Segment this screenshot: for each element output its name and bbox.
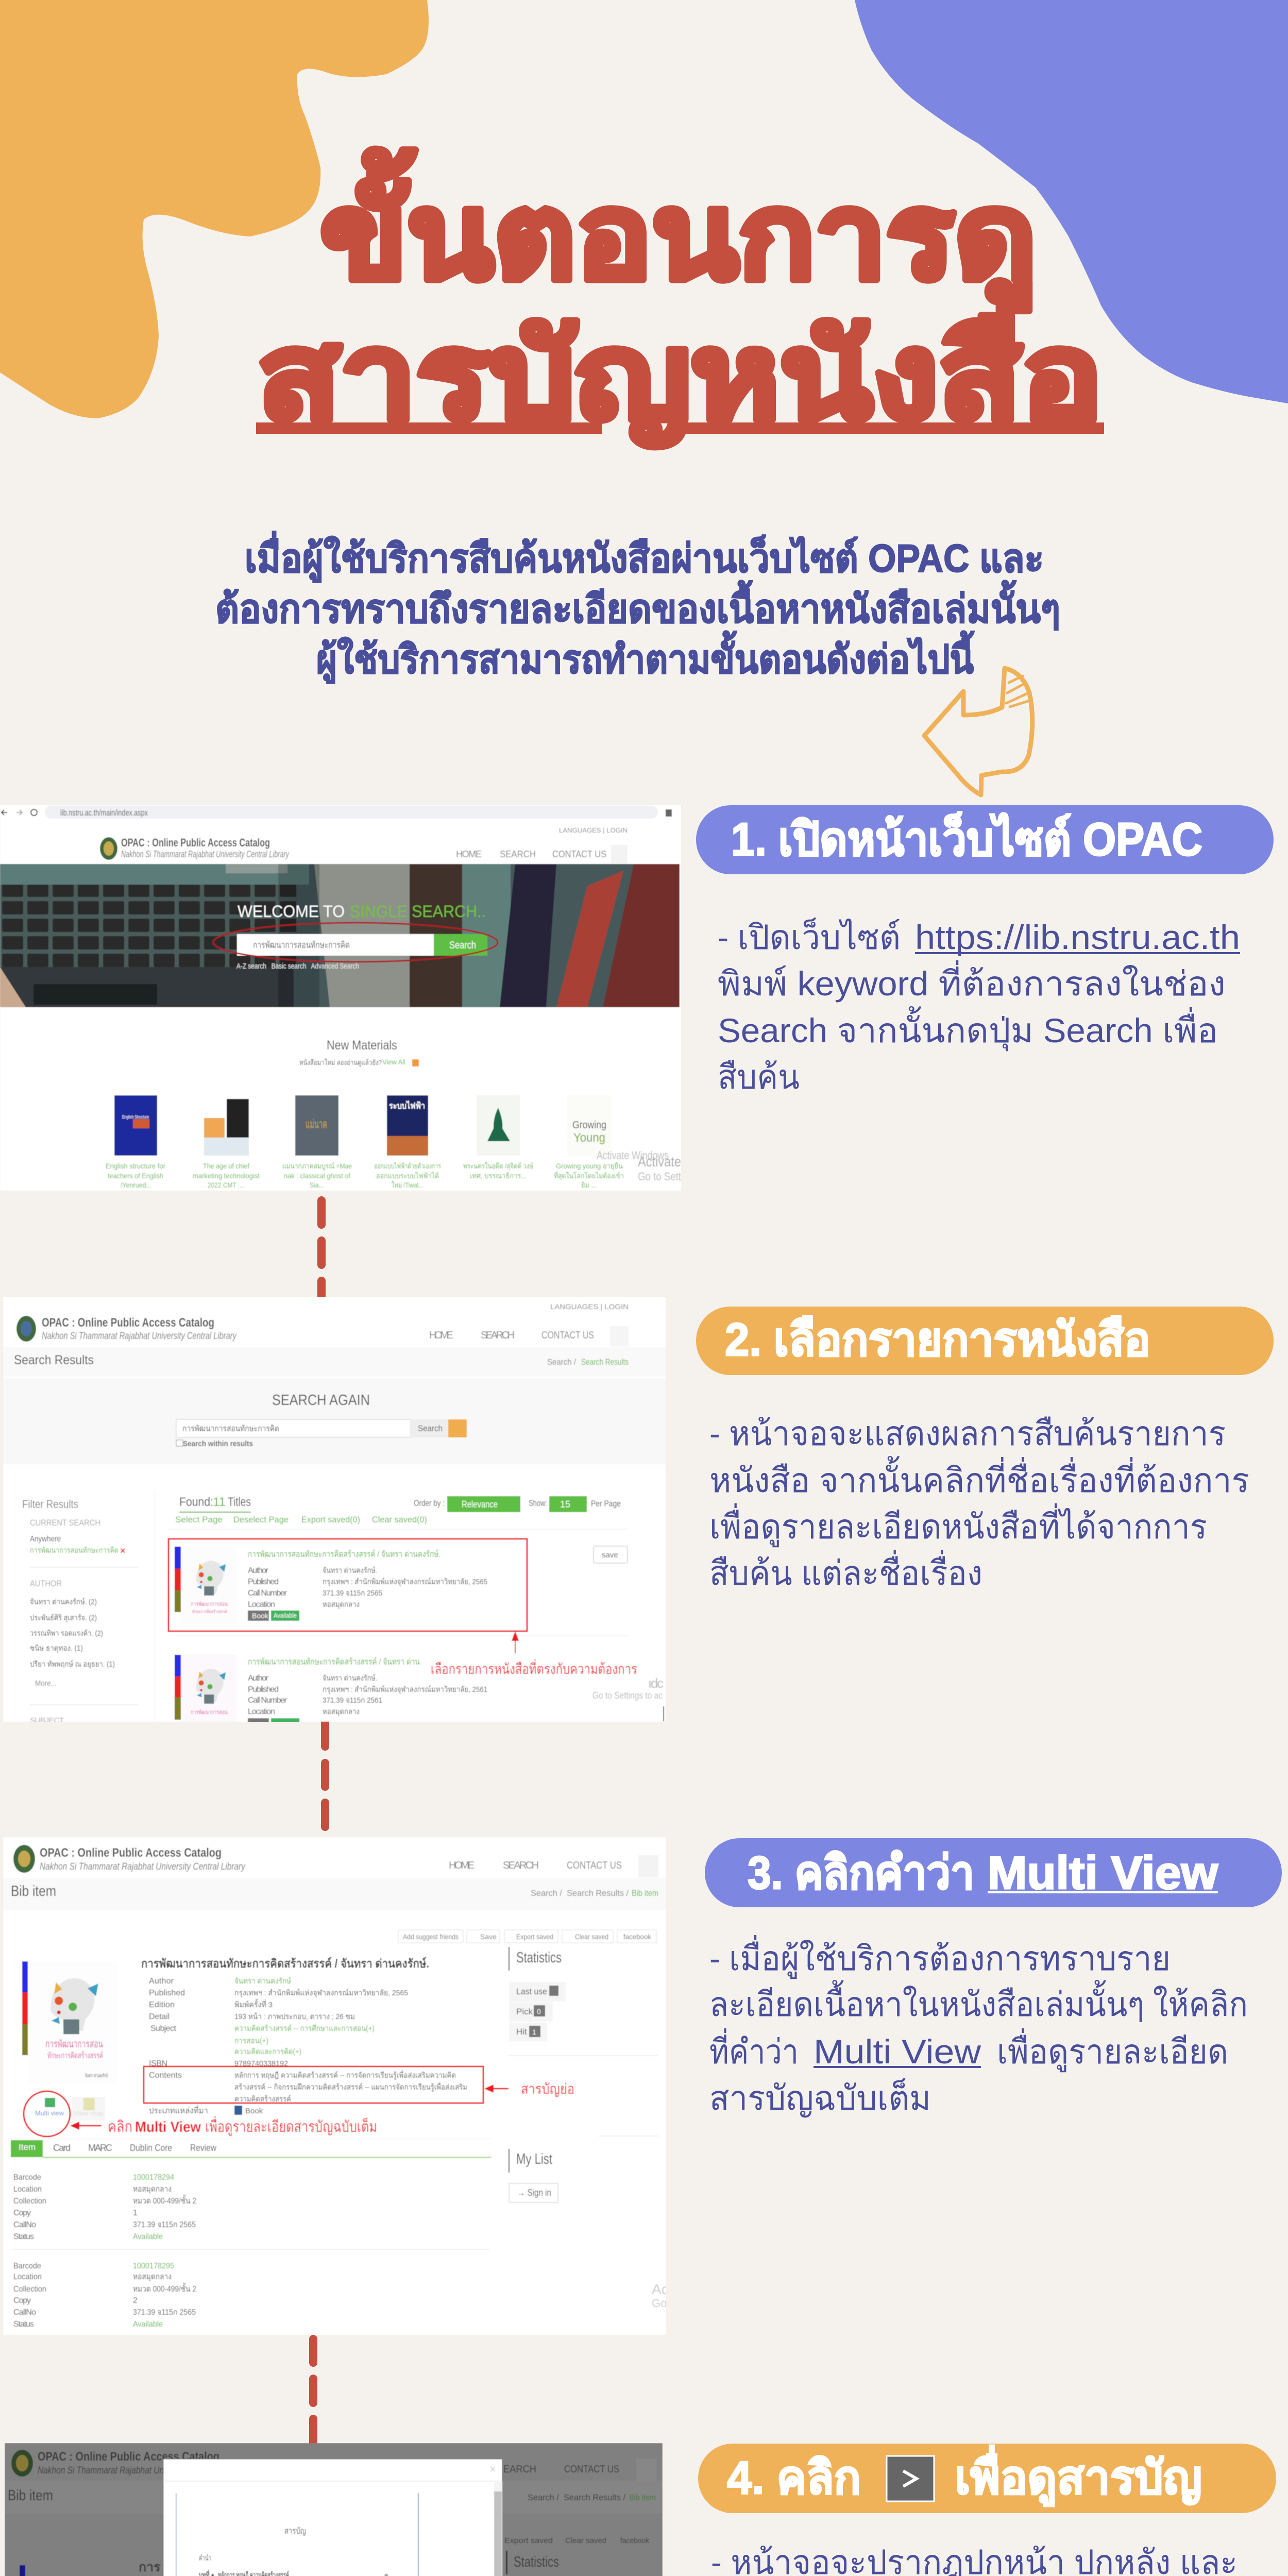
filter sidebar: SUBJECT: [30, 1716, 64, 1725]
book captions: marketing technologist: [193, 1172, 260, 1180]
filter sidebar: [22, 1490, 155, 1725]
panel: step 4 screenshot table of contents modal: [5, 2443, 663, 2576]
activate windows watermark: Go to Settings to ac: [592, 1690, 663, 1701]
statistics sidebar: Pick: [516, 2007, 533, 2016]
multi view icons and callout: เพื่อดูรายละเอียดสารบัญฉบับเต็ม: [205, 2116, 377, 2136]
dimmed sidebar: Statistics: [514, 2554, 559, 2570]
result card 2: 371.39 จ115ก 2561: [323, 1696, 382, 1705]
bibliographic details: กรุงเทพฯ : สำนักพิมพ์แห่งจุฬาลงกรณ์มหาวิทยาลัย, 2565: [234, 1989, 408, 1998]
results toolbar: Order by :: [414, 1498, 445, 1508]
bibliographic details: ความคิดและการคิด(+): [234, 2047, 301, 2056]
item holdings table: Copy: [13, 2209, 31, 2217]
search again form: SEARCH AGAIN: [272, 1392, 370, 1409]
dimmed details: การ: [139, 2560, 161, 2574]
multi view icons and callout: View map: [74, 2110, 104, 2117]
page title band: [3, 1878, 666, 1910]
result card 2: Call Number: [248, 1696, 287, 1705]
site header: SEARCH: [500, 849, 536, 859]
action buttons: Export saved: [516, 1933, 553, 1941]
site header: SEARCH: [481, 1330, 515, 1341]
welcome heading: [237, 905, 485, 918]
scanned table of contents page: คำนำ: [199, 2554, 211, 2563]
results toolbar: Titles: [228, 1495, 251, 1509]
red box and annotation: contents: สารบัญย่อ: [521, 2081, 574, 2097]
statistics sidebar: Last use: [516, 1987, 547, 1996]
new materials heading: หนังสือมาใหม่ ลองอ่านดูแล้วยัง?: [299, 1058, 382, 1067]
book captions: แม่นากภาคสมบูรณ์ =Mae: [282, 1162, 352, 1171]
dimmed site header: EARCH: [503, 2464, 536, 2475]
site header: OPAC : Online Public Access Catalog: [42, 1316, 214, 1330]
result card 2: การพัฒนาการสอน: [191, 1709, 228, 1716]
panel: step 3 screenshot bib item: [3, 1837, 669, 2335]
results toolbar: Clear saved(0): [372, 1515, 427, 1524]
results toolbar: Per Page: [591, 1499, 621, 1509]
item holdings table: CallNo: [13, 2308, 36, 2317]
bibliographic details: 193 หน้า : ภาพประกอบ, ตาราง ; 26 ซม: [234, 2012, 355, 2021]
my list sidebar: [509, 2149, 558, 2202]
heading pill: step 2: [696, 1307, 1274, 1375]
filter sidebar: CURRENT SEARCH: [30, 1518, 100, 1528]
item holdings table: 1000178294: [133, 2173, 174, 2182]
search again form: [3, 1378, 666, 1464]
multi view icons and callout: [24, 2091, 377, 2137]
modal dialog: ×: [489, 2463, 496, 2476]
book covers row: ระบบไฟฟ้า: [389, 1100, 425, 1111]
scanned table of contents page: [199, 2526, 395, 2576]
bibliographic details: สร้างสรรค์ -- กิจกรรมฝึกความคิดสร้างสรรค์ -- แผนการจัดการเรียนรู้เพื่อส่งเสริม: [234, 2081, 467, 2092]
intro text: ผู้ใช้บริการสามารถทำตามขั้นตอนดังต่อไปนี้: [316, 631, 975, 684]
scanned table of contents page: สารบัญ: [284, 2526, 306, 2536]
panel: step 2 screenshot search results: [3, 1297, 666, 1725]
item holdings table: Available: [133, 2320, 163, 2329]
item holdings table: Collection: [13, 2285, 46, 2294]
results toolbar: 15: [560, 1499, 570, 1510]
activate windows watermark: ıdc: [648, 1675, 664, 1691]
item holdings table: 371.39 จ115ก 2565: [133, 2308, 196, 2317]
text block: step 1 description: พิมพ์ keyword ที่ต้องการลงในช่อง: [718, 960, 1226, 1003]
results toolbar: Found:: [179, 1495, 213, 1509]
text block: step 1 description: [718, 917, 1240, 1096]
site header: LANGUAGES | LOGIN: [550, 1302, 629, 1311]
page title band: Bib item: [632, 1888, 658, 1898]
book cover: การพัฒนาการสอน: [45, 2039, 103, 2050]
text block: step 1 description: Search จากนั้นกดปุ่ม Search เพื่อ: [718, 1006, 1218, 1052]
results toolbar: [170, 1495, 629, 1530]
filter sidebar: AUTHOR: [30, 1579, 62, 1588]
heading pill: step 3: [705, 1838, 1282, 1907]
result card 1: Book: [252, 1612, 269, 1620]
item holdings table: Status: [13, 2320, 34, 2329]
page title band: [3, 1347, 666, 1377]
site header: HOME: [456, 849, 482, 859]
bibliographic details: Contents: [149, 2071, 182, 2080]
site header: [100, 826, 628, 863]
results toolbar: Export saved(0): [301, 1515, 360, 1524]
book covers row: Young: [573, 1131, 605, 1145]
my list sidebar: → Sign in: [517, 2188, 551, 2198]
book covers row: [114, 1095, 611, 1156]
heading pill: step 4: เพื่อดูสารบัญ: [955, 2445, 1202, 2506]
page title band: Search / Search Results /: [531, 1888, 629, 1898]
item holdings table: Copy: [13, 2296, 31, 2305]
item holdings table: Barcode: [13, 2262, 41, 2270]
statistics sidebar: Hit: [516, 2027, 527, 2037]
text block: step 3 description: สารบัญฉบับเต็ม: [709, 2078, 931, 2117]
text block: step 3 description: - เมื่อผู้ใช้บริการต้องการทราบราย: [709, 1935, 1171, 1979]
book covers row: แม่นาค: [306, 1117, 327, 1131]
text block: step 3 description: ที่คำว่า: [709, 2028, 799, 2071]
result card 2: จันทรา ด่านคงรักษ์.: [323, 1674, 377, 1683]
search again form: Search within results: [183, 1439, 253, 1448]
text block: step 3 description: Multi View: [814, 2032, 981, 2071]
bibliographic details: ประเภทแหล่งที่มา: [149, 2105, 208, 2115]
dimmed site header: OPAC : Online Public Access Catalog: [38, 2450, 219, 2464]
search box: A-Z search Basic search Advanced Search: [236, 962, 359, 971]
result card 1: Published: [248, 1578, 279, 1586]
title: สารบัญหนังสือ: [258, 310, 1103, 447]
dimmed sidebar: [504, 2536, 663, 2576]
heading pill: step 3: Multi View: [988, 1848, 1218, 1899]
search box: Search: [449, 940, 476, 951]
item holdings table: 371.39 จ115ก 2565: [133, 2221, 196, 2229]
new materials heading: View All: [382, 1058, 405, 1066]
book captions: English structure for: [106, 1162, 165, 1170]
result card 1: Author: [248, 1566, 269, 1575]
item holdings table: Available: [133, 2232, 163, 2241]
item holdings table: Barcode: [13, 2173, 41, 2182]
hero banner with keyboard and books: [0, 864, 680, 1007]
site header: [16, 1302, 629, 1346]
text block: step 2 description: สืบค้น แต่ละชื่อเรื่อง: [709, 1550, 982, 1592]
page title band: Search /: [547, 1357, 576, 1367]
my list sidebar: My List: [516, 2151, 552, 2167]
activate windows watermark: [592, 1675, 664, 1721]
bibliographic details: Published: [149, 1989, 185, 1997]
book captions: เทศ, บรรณาธิการ...: [470, 1172, 527, 1180]
filter sidebar: More...: [35, 1679, 57, 1688]
item holdings table: 1000178295: [133, 2262, 174, 2270]
filter sidebar: ปรียา ทัพพฤกษ์ ณ อยุธยา. (1): [30, 1660, 115, 1669]
book covers row: Growing: [572, 1120, 606, 1131]
activate windows watermark: [652, 2281, 669, 2310]
browser address bar: [2, 806, 672, 819]
page title band: Bib item: [11, 1883, 56, 1900]
book captions: พระนครในอดีต /สุจิตต์ วงษ์: [463, 1162, 533, 1171]
bibliographic details: การสอน(+): [234, 2037, 268, 2045]
bibliographic details: Author: [149, 1977, 174, 1986]
book cover: จันทรา ด่านคงรักษ์: [85, 2073, 108, 2079]
search again form: การพัฒนาการสอนทักษะการคิด: [182, 1425, 279, 1433]
dimmed sidebar: Export saved: [504, 2536, 553, 2545]
text block: step 2 description: [709, 1414, 1249, 1592]
filter sidebar: ชนิษ ธาตุทอง. (1): [30, 1644, 83, 1653]
text block: step 2 description: - หน้าจอจะแสดงผลการสืบค้นรายการ: [709, 1414, 1226, 1452]
tabs: [11, 2139, 491, 2158]
dimmed sidebar: facebook: [620, 2536, 649, 2545]
book captions: /Yenrued...: [121, 1181, 151, 1189]
text block: step 3 description: ละเอียดเนื้อหาในหนังสือเล่มนั้นๆ ให้คลิก: [709, 1980, 1248, 2023]
new materials heading: New Materials: [327, 1038, 397, 1053]
item holdings table: Collection: [13, 2197, 46, 2206]
book covers row: English Structure: [122, 1114, 149, 1120]
filter sidebar: การพัฒนาการสอนทักษะการคิด: [30, 1546, 118, 1555]
bibliographic details: 9789740338192: [234, 2059, 288, 2068]
book captions: Sia...: [310, 1181, 324, 1189]
result card 1: 371.39 จ115ก 2565: [323, 1589, 382, 1598]
tabs: Card: [53, 2143, 71, 2153]
book captions: 2022 CMT :...: [208, 1181, 245, 1189]
results toolbar: Select Page: [175, 1515, 223, 1524]
browser address bar: lib.nstru.ac.th/main/index.aspx: [60, 808, 148, 818]
title: ขั้นตอนการดู: [320, 149, 1037, 311]
red annotation: choose matching book: เลือกรายการหนังสือที่ตรงกับความต้องการ: [431, 1659, 637, 1677]
action buttons: Clear saved: [575, 1933, 608, 1941]
heading pill: step 3: 3. คลิกคำว่า: [748, 1848, 974, 1899]
modal dialog: [163, 2459, 502, 2576]
item holdings table: Status: [13, 2232, 34, 2241]
bibliographic details: ISBN: [149, 2059, 167, 2068]
site header: LANGUAGES | LOGIN: [559, 826, 628, 834]
activate windows watermark: Ac: [652, 2281, 669, 2297]
item holdings table: CallNo: [13, 2221, 36, 2229]
site header: HOME: [449, 1860, 474, 1871]
activate windows watermark: Go: [652, 2297, 667, 2310]
site header: Nakhon Si Thammarat Rajabhat University Central Library: [121, 849, 290, 859]
result card 1: save: [602, 1551, 618, 1560]
book captions: ออกแบบระบบไฟฟ้าได้: [376, 1172, 439, 1180]
site header: OPAC : Online Public Access Catalog: [121, 836, 270, 849]
item holdings table: Location: [13, 2273, 42, 2281]
result card 1: หอสมุดกลาง: [323, 1600, 360, 1609]
book captions: ออกแบบไฟฟ้าด้วยตัวเองการ: [374, 1162, 441, 1170]
result card 1: Call Number: [248, 1589, 287, 1598]
result card 2: การพัฒนาการสอนทักษะการคิดสร้างสรรค์ / จันทรา ด่าน: [248, 1657, 420, 1667]
search box: [213, 923, 498, 971]
icon: hand-drawn arrow pointing left: [924, 668, 1032, 795]
filter sidebar: วรรณทิพา รอดแรงค้า. (2): [30, 1629, 103, 1638]
item holdings table: หอสมุดกลาง: [133, 2273, 172, 2282]
bibliographic details: ความคิดสร้างสรรค์: [234, 2095, 291, 2104]
page title band: Search Results: [14, 1353, 94, 1367]
multi view icons and callout: คลิก: [108, 2119, 132, 2136]
dimmed book cover: [20, 2565, 102, 2576]
result card 2: กรุงเทพฯ : สำนักพิมพ์แห่งจุฬาลงกรณ์มหาวิทยาลัย, 2561: [323, 1685, 487, 1694]
icon: next button: [887, 2456, 934, 2501]
book captions: [106, 1162, 624, 1189]
book cover: ทักษะการคิดสร้างสรรค์: [47, 2050, 103, 2060]
statistics sidebar: [509, 1947, 658, 2137]
action buttons: facebook: [623, 1933, 652, 1941]
text block: step 1 description: สืบค้น: [718, 1058, 800, 1096]
decorative orange blob: [0, 0, 429, 418]
statistics sidebar: Statistics: [516, 1950, 562, 1966]
filter sidebar: Anywhere: [30, 1535, 61, 1544]
text block: step 3 description: เพื่อดูรายละเอียด: [997, 2028, 1228, 2073]
result card 1: Available: [274, 1612, 297, 1619]
statistics sidebar: 1: [532, 2028, 536, 2036]
result card 2: Location: [248, 1707, 275, 1716]
text block: step 2 description: เพื่อดูรายละเอียดหนังสือที่ได้จากการ: [709, 1503, 1207, 1548]
bibliographic details: Edition: [149, 2001, 175, 2009]
tabs: MARC: [88, 2143, 112, 2153]
red annotation: choose matching book: [431, 1631, 637, 1677]
item holdings table: หอสมุดกลาง: [133, 2185, 172, 2194]
results toolbar: Show:: [529, 1498, 547, 1508]
text block: step 1 description: - เปิดเว็บไซต์: [718, 917, 901, 956]
activate windows watermark: [597, 1151, 681, 1181]
site header: [13, 1845, 658, 1877]
tabs: Dublin Core: [130, 2143, 172, 2153]
action buttons: [398, 1930, 656, 1943]
item holdings table: Location: [13, 2185, 42, 2194]
welcome heading: SINGLE SEARCH..: [350, 902, 486, 921]
activate windows watermark: Go to Sett: [638, 1170, 681, 1183]
book cover: [22, 1961, 118, 2084]
bibliographic details: Subject: [150, 2024, 177, 2033]
site header: Nakhon Si Thammarat Rajabhat University Central Library: [40, 1861, 246, 1872]
multi view icons and callout: Multi View: [135, 2119, 201, 2136]
site header: Nakhon Si Thammarat Rajabhat University Central Library: [42, 1331, 237, 1342]
filter sidebar: Filter Results: [22, 1498, 78, 1511]
book captions: ยิม ...: [581, 1181, 597, 1189]
result card 1: จันทรา ด่านคงรักษ์.: [323, 1566, 377, 1575]
tabs: Review: [190, 2143, 217, 2153]
filter sidebar: ×: [120, 1546, 126, 1556]
result card 1: Location: [248, 1600, 275, 1609]
site header: HOME: [429, 1330, 453, 1341]
dimmed site header: CONTACT US: [564, 2464, 619, 2475]
bibliographic details: หลักการ ทฤษฎี ความคิดสร้างสรรค์ -- การจัดการเรียนรู้เพื่อส่งเสริมความคิด: [234, 2070, 456, 2080]
heading pill: step 1: [696, 805, 1274, 874]
bibliographic details: จันทรา ด่านคงรักษ์: [234, 1977, 291, 1986]
intro text: เมื่อผู้ใช้บริการสืบค้นหนังสือผ่านเว็บไซต์ OPAC และ: [245, 531, 1044, 583]
title: [256, 149, 1104, 447]
activate windows watermark: Activate Windows: [597, 1149, 669, 1162]
action buttons: Save: [480, 1933, 497, 1941]
results toolbar: 11: [213, 1495, 226, 1509]
item holdings table: [13, 2173, 489, 2329]
text block: step 1 description: https://lib.nstru.ac.th: [915, 918, 1240, 956]
bibliographic details: ความคิดสร้างสรรค์ -- การศึกษาและการสอน(+): [234, 2024, 375, 2033]
heading pill: step 4: [698, 2444, 1276, 2513]
result card 1: ทักษะการคิดสร้างสรรค์: [192, 1608, 227, 1614]
result card 2: หอสมุดกลาง: [323, 1707, 360, 1717]
book captions: nak : classical ghost of: [284, 1172, 350, 1180]
results toolbar: Deselect Page: [233, 1515, 289, 1524]
dimmed site header: Bib item: [629, 2493, 656, 2502]
bibliographic details: Detail: [149, 2012, 170, 2021]
book captions: ใหม่ /Tiwat...: [392, 1181, 423, 1189]
book captions: Growing young อายุยืน: [556, 1162, 623, 1171]
results toolbar: Relevance: [462, 1499, 498, 1510]
item holdings table: หมวด 000-499/ชั้น 2: [133, 2283, 196, 2294]
activate windows watermark: Activate: [638, 1154, 681, 1170]
site header: CONTACT US: [567, 1860, 622, 1871]
filter sidebar: จันทรา ด่านคงรักษ์. (2): [30, 1598, 97, 1606]
search again form: Search: [418, 1423, 443, 1433]
page title band: Search Results: [581, 1357, 629, 1367]
bibliographic details: [141, 1957, 467, 2115]
intro text: [215, 531, 1060, 684]
book captions: teachers of English: [108, 1172, 163, 1180]
bibliographic details: Book: [245, 2107, 263, 2115]
site header: OPAC : Online Public Access Catalog: [40, 1846, 222, 1860]
intro text: ต้องการทราบถึงรายละเอียดของเนื้อหาหนังสือเล่มนั้นๆ: [215, 580, 1060, 631]
multi view icons and callout: Multi view: [35, 2109, 64, 2117]
result card 1: การพัฒนาการสอนทักษะการคิดสร้างสรรค์ / จันทรา ด่านคงรักษ์.: [248, 1549, 440, 1559]
heading pill: step 1: 1. เปิดหน้าเว็บไซต์ OPAC: [731, 811, 1202, 866]
dimmed sidebar: Clear saved: [565, 2536, 606, 2545]
site header: SEARCH: [503, 1860, 539, 1871]
red box and annotation: contents: [144, 2066, 574, 2103]
panel: step 1 screenshot OPAC home page: [0, 805, 681, 1191]
result card 1: [168, 1539, 628, 1636]
text block: step 3 description: [709, 1935, 1248, 2117]
site header: CONTACT US: [541, 1330, 594, 1341]
book captions: The age of chief: [203, 1162, 249, 1170]
connector dashes between steps: [309, 1196, 329, 2448]
result card 1: การพัฒนาการสอน: [191, 1601, 228, 1607]
text block: step 2 description: หนังสือ จากนั้นคลิกที่ชื่อเรื่องที่ต้องการ: [709, 1456, 1249, 1499]
statistics sidebar: 0: [537, 2007, 541, 2015]
new materials heading: [299, 1038, 419, 1067]
bibliographic details: พิมพ์ครั้งที่ 3: [234, 1999, 273, 2009]
dimmed site header: Nakhon Si Thammarat Rajabhat University Central Library: [38, 2465, 244, 2476]
welcome heading: WELCOME TO: [238, 902, 345, 921]
item holdings table: 1: [133, 2209, 138, 2217]
result card 2: Published: [248, 1685, 279, 1694]
heading pill: step 4: 4. คลิก: [727, 2452, 861, 2504]
book captions: ที่สุดในโลกโดยไม่ต้องเข้า: [554, 1171, 624, 1180]
result card 1: กรุงเทพฯ : สำนักพิมพ์แห่งจุฬาลงกรณ์มหาวิทยาลัย, 2565: [323, 1578, 487, 1587]
result card 2: [175, 1655, 487, 1723]
filter sidebar: ประพันธ์ศิริ สุเสารัจ. (2): [30, 1614, 97, 1623]
dimmed site header: Search / Search Results /: [528, 2493, 625, 2502]
tabs: Item: [19, 2142, 36, 2152]
heading pill: step 2: 2. เลือกรายการหนังสือ: [725, 1314, 1150, 1366]
decorative blue blob: [855, 0, 1288, 403]
bibliographic details: การพัฒนาการสอนทักษะการคิดสร้างสรรค์ / จันทรา ด่านคงรักษ์.: [141, 1957, 429, 1970]
search box: การพัฒนาการสอนทักษะการคิด: [253, 940, 350, 950]
dimmed site header: [8, 2450, 656, 2504]
site header: CONTACT US: [552, 849, 606, 859]
action buttons: Add suggest friends: [403, 1933, 459, 1941]
dimmed site header: Bib item: [8, 2487, 53, 2504]
item holdings table: 2: [133, 2296, 138, 2305]
result card 2: Author: [248, 1674, 269, 1683]
item holdings table: หมวด 000-499/ชั้น 2: [133, 2195, 196, 2206]
